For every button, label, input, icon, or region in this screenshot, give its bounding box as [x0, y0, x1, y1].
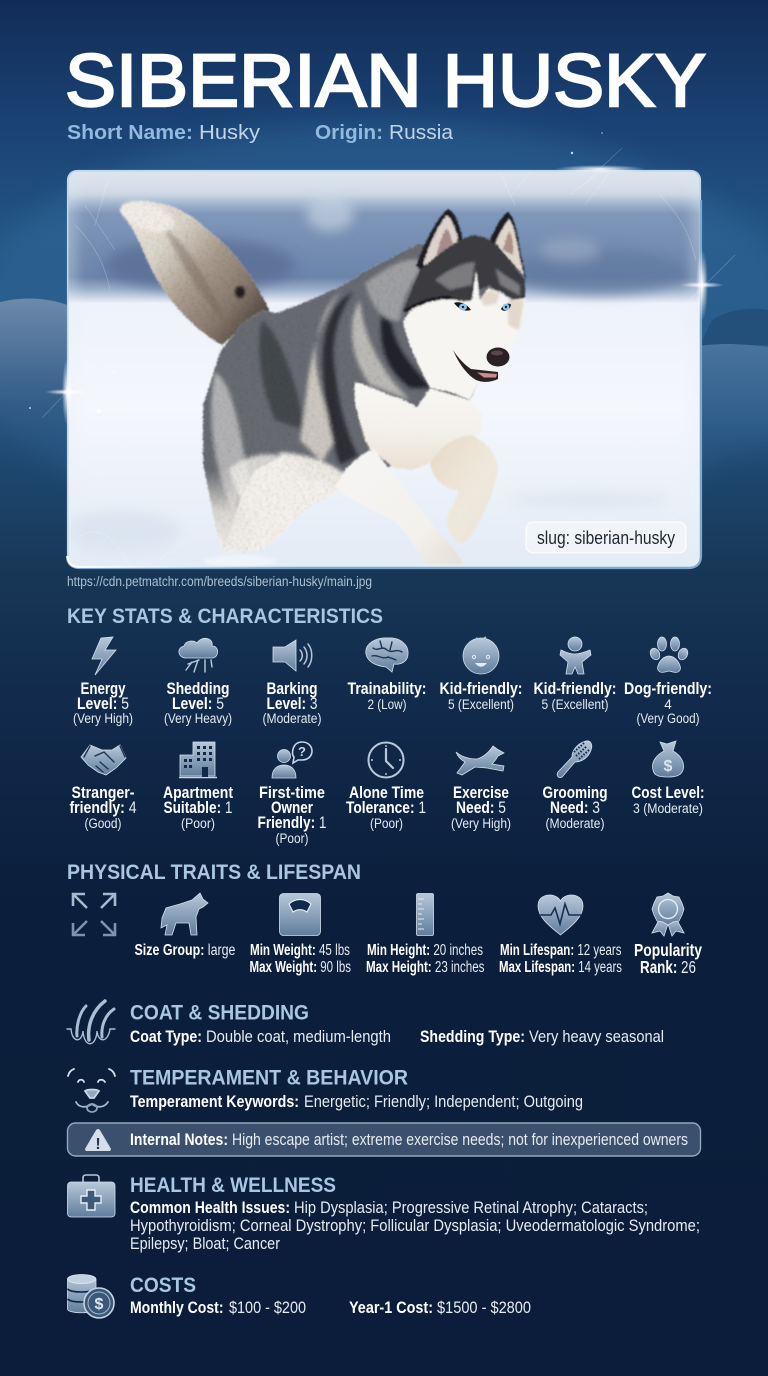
icon: shedding cloud [179, 638, 218, 672]
text: kid-friendly [440, 680, 522, 712]
stat: energy level [73, 637, 133, 726]
stat: dog-friendly [624, 637, 712, 726]
panel: coat and shedding [67, 1000, 664, 1046]
husky eyes [454, 302, 511, 311]
text: temperament keywords [130, 1092, 583, 1111]
text: kid-friendly [534, 680, 616, 712]
text: shedding level: Level: 5 [172, 695, 224, 713]
text: apartment suitable: (Poor) [181, 816, 215, 831]
trait: lifespan: Max Lifespan: 14 years [499, 959, 622, 976]
text: exercise need [451, 784, 511, 831]
subtitle: short name and origin: Russia [389, 121, 454, 144]
text: dog-friendly: 4 [664, 697, 672, 712]
husky tail [118, 196, 270, 345]
icon: dog silhouette [161, 893, 208, 935]
text: stranger-friendly [70, 784, 136, 831]
text: shedding level: (Very Heavy) [164, 711, 232, 726]
panel: physical traits [73, 893, 702, 977]
icon: clock [368, 742, 404, 778]
text: coat details [130, 1027, 664, 1046]
text: apartment suitable: Apartment [163, 784, 233, 802]
text: barking level: (Moderate) [262, 711, 322, 726]
heading: physical traits: PHYSICAL TRAITS & LIFESPAN [67, 860, 361, 884]
text: kid-friendly: 5 (Excellent) [542, 697, 608, 712]
text: grooming need: Need: 3 [550, 799, 600, 817]
text: common health issues [130, 1198, 700, 1253]
icon: child figure [560, 637, 591, 674]
text: exercise need: Need: 5 [456, 799, 506, 817]
text: first-time owner friendly: (Poor) [276, 831, 308, 846]
stat: apartment suitable [163, 742, 233, 831]
text: shedding level: Shedding [166, 680, 230, 698]
lens flares [29, 132, 735, 426]
icon: coins: $ [95, 1296, 104, 1313]
text: dog-friendly: (Very Good) [636, 711, 700, 726]
icon: first aid kit [68, 1175, 115, 1217]
stat: barking level [262, 640, 322, 726]
stat: first-time owner friendly [258, 742, 326, 846]
text: alone time tolerance: Tolerance: 1 [346, 799, 426, 817]
text: trainability [348, 680, 426, 712]
husky front legs [335, 435, 498, 565]
text: energy level: Level: 5 [77, 695, 129, 713]
subtitle: short name and origin: Short Name: [67, 121, 193, 144]
trait: size group: Size Group: large [134, 942, 236, 959]
text: coat details: Double coat, medium-length [206, 1027, 391, 1046]
stat: cost level [632, 741, 704, 816]
trait: popularity rank: Popularity [634, 940, 702, 960]
text: energy level: (Very High) [73, 711, 133, 726]
text: energy level: Energy [80, 680, 126, 698]
text: cost values: Monthly Cost: [130, 1298, 224, 1317]
slug badge [526, 522, 686, 553]
text: trainability: Trainability: [348, 680, 426, 698]
text: internal notes: Internal Notes: [130, 1130, 228, 1149]
icon: speaker [273, 640, 312, 671]
stat: kid-friendly figure [534, 637, 616, 712]
panel: hero photo [60, 170, 701, 572]
text: barking level: Barking [266, 680, 318, 698]
text: grooming need: (Moderate) [546, 816, 604, 831]
stat: shedding level [164, 638, 232, 726]
trait: lifespan [499, 942, 622, 976]
subtitle: short name and origin: Origin: [315, 121, 383, 144]
icon: warning triangle: ! [95, 1136, 101, 1153]
text: common health issues: Hypothyroidism; Corneal Dystrophy; Follicular Dysplasia; Uveodermatologic Syndrome; [130, 1216, 700, 1235]
text: cost level: Cost Level: [632, 784, 704, 802]
trait: weight: Min Weight: 45 lbs [250, 942, 350, 959]
heading: coat and shedding: COAT & SHEDDING [130, 1000, 309, 1024]
stat: stranger-friendly [70, 745, 136, 831]
husky muzzle [453, 348, 510, 382]
text: first-time owner friendly: Owner [271, 799, 313, 817]
text: stranger-friendly: friendly: 4 [70, 799, 136, 817]
snow spray [206, 556, 274, 566]
text: dog-friendly [624, 680, 712, 726]
icon: warning triangle [85, 1129, 111, 1153]
trait: height: Min Height: 20 inches [367, 942, 483, 959]
text: grooming need [542, 784, 608, 831]
trait: weight [250, 942, 351, 976]
text: cost values: Year-1 Cost: [349, 1298, 433, 1317]
photo subject: running husky [118, 196, 526, 572]
text: first-time owner friendly: First-time [259, 784, 325, 802]
text: cost level [632, 784, 704, 816]
icon: hair follicles [67, 1001, 115, 1044]
icon: weight scale [280, 894, 320, 936]
trait: popularity rank: Rank: 26 [640, 957, 696, 977]
stat: exercise need [451, 746, 511, 831]
text: exercise need: Exercise [453, 784, 509, 802]
panel: health and wellness [68, 1173, 700, 1253]
text: coat details: Very heavy seasonal [529, 1027, 664, 1046]
text: barking level [262, 680, 322, 726]
text: coat details: Shedding Type: [420, 1027, 525, 1046]
icon: lightning bolt [92, 637, 116, 675]
subtitle: short name and origin: Husky [199, 121, 261, 144]
text: apartment suitable [163, 784, 233, 831]
text: first-time owner friendly: Friendly: 1 [258, 814, 326, 832]
slug badge: slug: siberian-husky [537, 528, 675, 548]
text: trainability: 2 (Low) [368, 697, 406, 712]
icon: apartment buildings [179, 742, 217, 778]
icon: size arrows [73, 894, 115, 935]
text: barking level: Level: 3 [266, 695, 318, 713]
text: first-time owner friendly [258, 784, 326, 846]
icon: running dog [456, 746, 504, 775]
frost vignette [67, 170, 701, 568]
text: kid-friendly: 5 (Excellent) [448, 697, 514, 712]
trait: height: Max Height: 23 inches [366, 959, 485, 976]
icon: award ribbon [652, 893, 684, 936]
panel: temperament [68, 1066, 583, 1112]
icon: paw [648, 637, 690, 672]
panel: costs [68, 1273, 531, 1318]
icon: heart with pulse [538, 895, 583, 935]
text: common health issues: Common Health Issues: [130, 1198, 290, 1217]
heading: temperament: TEMPERAMENT & BEHAVIOR [130, 1066, 408, 1090]
trait: height [366, 942, 485, 976]
text: coat details: Coat Type: [130, 1027, 202, 1046]
husky body [203, 240, 525, 553]
stat: trainability [348, 638, 426, 712]
stat: kid-friendly baby [440, 637, 522, 712]
husky chest [354, 382, 482, 470]
panel: key stats grid [70, 637, 712, 846]
icon: brain [366, 638, 408, 672]
text: grooming need: Grooming [542, 784, 608, 802]
stat: alone time tolerance [346, 742, 426, 831]
text: alone time tolerance: (Poor) [370, 816, 403, 831]
title: SIBERIAN HUSKY [65, 39, 706, 122]
text: apartment suitable: Suitable: 1 [164, 799, 232, 817]
text: energy level [73, 680, 133, 726]
text: cost values [130, 1298, 531, 1317]
text: temperament keywords: Energetic; Friendly; Independent; Outgoing [304, 1092, 583, 1111]
icon: dog face [68, 1069, 115, 1112]
heading: health: HEALTH & WELLNESS [130, 1173, 336, 1197]
icon: baby face [463, 637, 499, 674]
trait: popularity rank [634, 940, 702, 977]
text: exercise need: (Very High) [451, 816, 511, 831]
heading: costs: COSTS [130, 1273, 196, 1297]
icon: handshake [81, 745, 126, 775]
husky ears [416, 209, 526, 278]
text: shedding level [164, 680, 232, 726]
text: stranger-friendly: Stranger- [72, 784, 134, 802]
husky head [403, 236, 525, 400]
text: stranger-friendly: (Good) [84, 816, 122, 831]
callout: internal notes [68, 1123, 700, 1156]
text: kid-friendly: Kid-friendly: [440, 680, 522, 698]
text: temperament keywords: Temperament Keywords: [130, 1092, 299, 1111]
image url: https://cdn.petmatchr.com/breeds/siberian-husky/main.jpg [67, 574, 372, 589]
text: alone time tolerance [346, 784, 426, 831]
icon: person with question bubble: ? [298, 744, 306, 759]
icon: ruler [416, 894, 434, 936]
stat: grooming need [542, 741, 608, 831]
icon: money bag: $ [664, 758, 673, 775]
text: cost level: 3 (Moderate) [633, 801, 703, 816]
text: kid-friendly: Kid-friendly: [534, 680, 616, 698]
text: cost values: $1500 - $2800 [437, 1298, 531, 1317]
text: cost values: $100 - $200 [229, 1298, 306, 1317]
text: common health issues: Epilepsy; Bloat; Cancer [130, 1234, 280, 1253]
text: dog-friendly: Dog-friendly: [624, 680, 712, 698]
heading: key stats: KEY STATS & CHARACTERISTICS [67, 604, 383, 628]
text: common health issues: Hip Dysplasia; Progressive Retinal Atrophy; Cataracts; [294, 1198, 648, 1217]
text: alone time tolerance: Alone Time [349, 784, 424, 802]
icon: grooming brush [557, 741, 592, 778]
photo background: snowy field [60, 170, 701, 568]
subtitle: short name and origin [67, 121, 454, 144]
icon: coins [68, 1274, 114, 1318]
trait: weight: Max Weight: 90 lbs [250, 959, 351, 976]
trait: lifespan: Min Lifespan: 12 years [500, 942, 622, 959]
